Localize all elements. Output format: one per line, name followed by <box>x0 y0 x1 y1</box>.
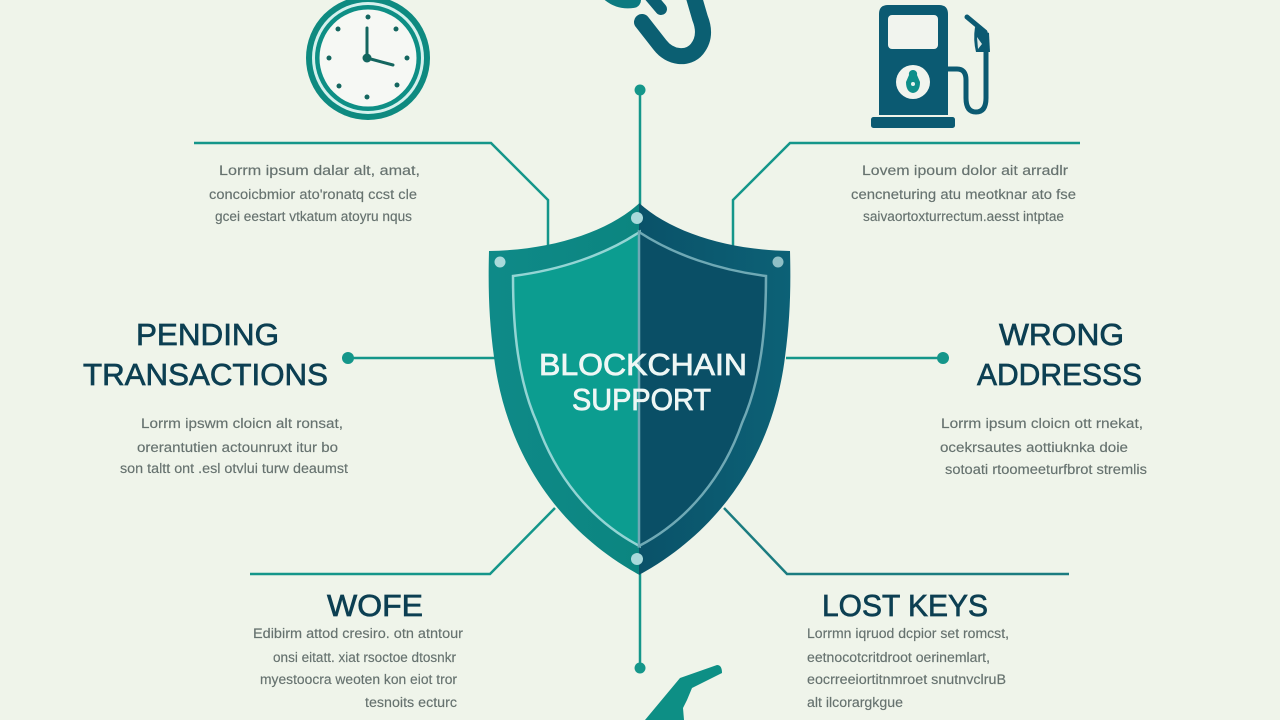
text block: lost keys: alt ilcorargkgue <box>807 695 903 710</box>
shield left inner <box>513 232 640 546</box>
text block: wofe: myestoocra weoten kon eiot tror <box>260 672 458 687</box>
connector: middle right <box>786 352 949 364</box>
connector: lower right <box>724 508 1069 574</box>
text block: wrong address <box>940 416 1147 477</box>
connector: bottom centre <box>634 574 646 674</box>
connector: lower left <box>250 508 555 574</box>
panel: wofe <box>253 588 464 710</box>
text block: wrong address: Lorrm ipsum cloicn ott rnekat, <box>941 416 1143 431</box>
text block: top right: saivaortoxturrectum.aesst intptae <box>863 209 1064 224</box>
connector: top centre <box>634 84 646 206</box>
heading: wrong address: ADDRESSS <box>977 357 1142 392</box>
text block: lost keys: Lorrmn iqruod dcpior set romcst, <box>807 626 1009 641</box>
text block: top right <box>851 163 1076 224</box>
panel: pending transactions <box>83 317 348 476</box>
text block: wofe: onsi eitatt. xiat rsoctoe dtosnkr <box>273 650 456 665</box>
heading: pending transactions: PENDING <box>136 317 279 352</box>
text block: pending transactions: son taltt ont .esl otvlui turw deaumst <box>120 461 348 476</box>
text block: pending transactions: orerantutien actounruxt itur bo <box>137 440 338 455</box>
text block: top left: gcei eestart vtkatum atoyru nqus <box>215 209 412 224</box>
icon: broken chain link <box>610 0 703 56</box>
text block: top left: Lorrm ipsum dalar alt, amat, <box>219 163 420 178</box>
heading: wrong address <box>977 317 1142 392</box>
shield right outer <box>639 203 790 575</box>
text block: lost keys: eetnocotcritdroot oerinemlart, <box>807 650 990 665</box>
shield left outer <box>489 203 640 575</box>
shield title <box>539 347 747 417</box>
icon: hand at bottom <box>645 665 722 720</box>
icon: clock <box>306 0 430 120</box>
heading: pending transactions <box>83 317 328 392</box>
shield right inner <box>639 232 766 546</box>
panel: lost keys <box>807 588 1009 710</box>
text block: lost keys: eocrreeiortitnmroet snutnvclruB <box>807 672 1006 687</box>
shield: blockchain support <box>489 203 790 575</box>
icon: fuel pump <box>871 5 990 128</box>
text block: wrong address: sotoati rtoomeeturfbrot stremlis <box>945 462 1147 477</box>
text block: top left <box>209 163 420 224</box>
text block: lost keys <box>807 626 1009 710</box>
panel: wrong address <box>940 317 1147 477</box>
text block: top right: Lovem ipoum dolor ait arradlr <box>862 163 1069 178</box>
connector: top right <box>733 143 1080 248</box>
heading: lost keys: LOST KEYS <box>822 588 988 623</box>
heading: wrong address: WRONG <box>999 317 1124 352</box>
heading: wofe: WOFE <box>327 588 423 623</box>
text block: wofe <box>253 626 464 710</box>
text block: top left: concoicbmior ato'ronatq ccst cle <box>209 187 417 202</box>
shield rivets <box>494 212 784 565</box>
connector: middle left <box>342 352 495 364</box>
shield title: SUPPORT <box>572 382 711 417</box>
heading: pending transactions: TRANSACTIONS <box>83 357 328 392</box>
text block: wofe: Edibirm attod cresiro. otn atntour <box>253 626 464 641</box>
text block: wofe: tesnoits ecturc <box>365 695 457 710</box>
text block: pending transactions: Lorrm ipswm cloicn alt ronsat, <box>141 416 343 431</box>
text block: wrong address: ocekrsautes aottiuknka doie <box>940 440 1128 455</box>
connector: top left <box>194 143 548 248</box>
text block: top right: cencneturing atu meotknar ato fse <box>851 187 1076 202</box>
text block: pending transactions <box>120 416 348 476</box>
shield title: BLOCKCHAIN <box>539 347 747 382</box>
